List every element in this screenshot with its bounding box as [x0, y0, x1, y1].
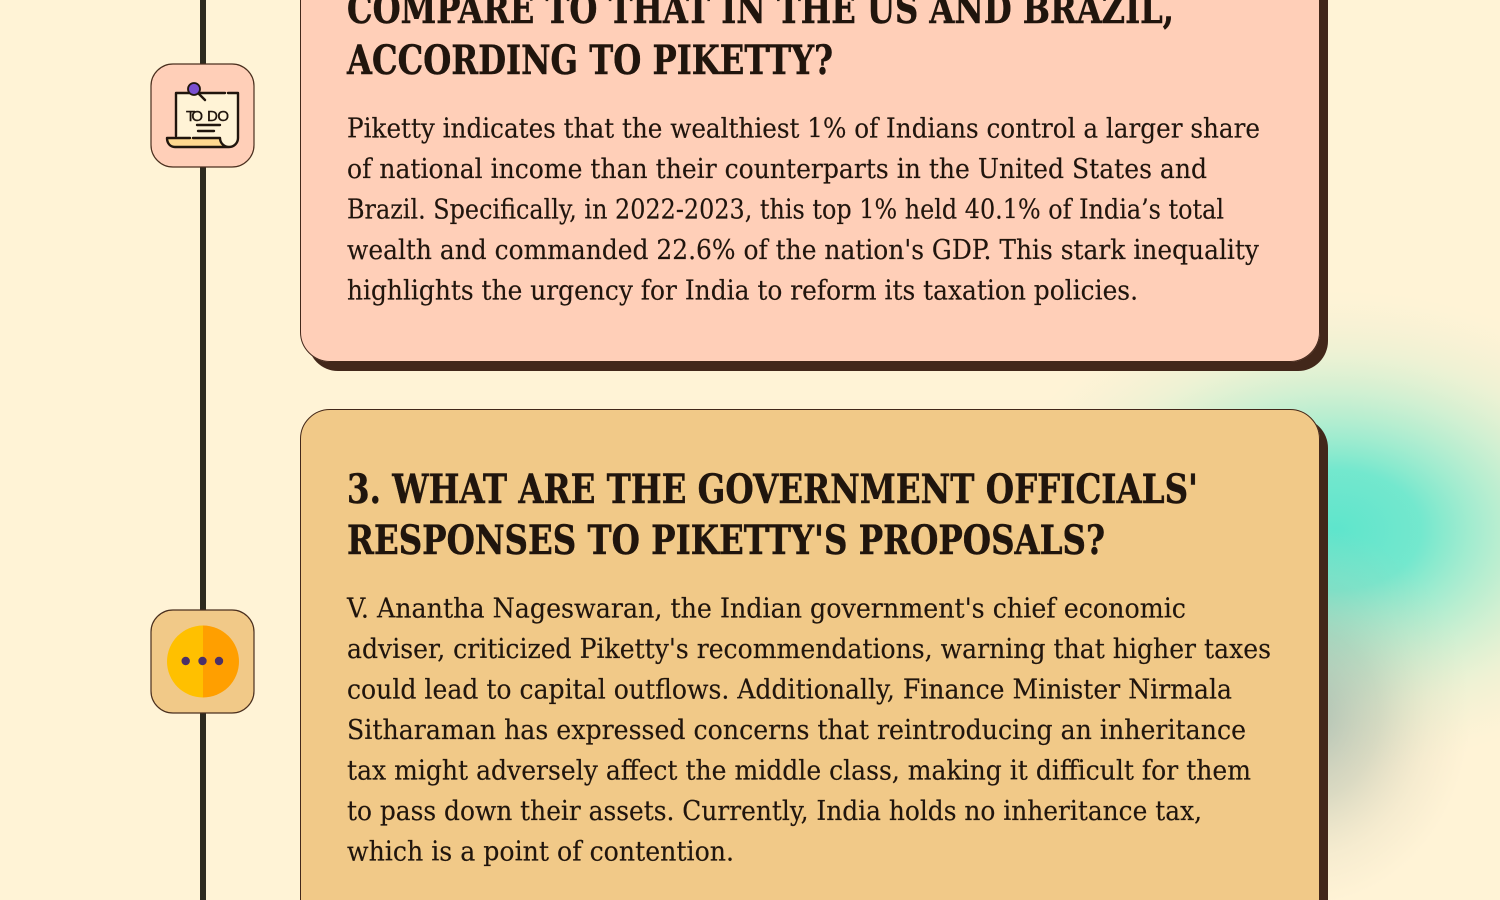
icon: to-do note: DO [207, 108, 229, 125]
text block: answer 3: adviser, criticized Piketty's recommendations, warning that higher taxes [347, 634, 1271, 665]
heading: question 3: 3. WHAT ARE THE GOVERNMENT OFFICIALS' [347, 466, 1198, 513]
text block: answer 3: to pass down their assets. Currently, India holds no inheritance tax, [347, 796, 1202, 827]
text block: answer 3 [346, 594, 1271, 868]
text block: answer 3: V. Anantha Nageswaran, the Indian government's chief economic [346, 594, 1186, 625]
icon: to-do note [151, 64, 254, 167]
heading: question 3 [347, 466, 1198, 564]
text block: answer 2 [347, 114, 1260, 307]
heading: question 3: RESPONSES TO PIKETTY'S PROPOSALS? [347, 517, 1105, 564]
text block: answer 3: Sitharaman has expressed concerns that reintroducing an inheritance [347, 715, 1246, 746]
heading: question 2 [346, 0, 1174, 84]
icon: to-do note: TO [186, 108, 203, 125]
text block: answer 2: highlights the urgency for India to reform its taxation policies. [347, 276, 1138, 307]
text block: answer 2: wealth and commanded 22.6% of the nation's GDP. This stark inequality [347, 235, 1260, 266]
text block: answer 3: could lead to capital outflows. Additionally, Finance Minister Nirmala [347, 675, 1232, 706]
icon: speech dots [151, 610, 254, 713]
text block: answer 2: Piketty indicates that the wealthiest 1% of Indians control a larger share [347, 114, 1260, 145]
card 3 shadow and body [300, 409, 1328, 900]
text block: answer 3: tax might adversely affect the middle class, making it difficult for them [347, 756, 1251, 787]
decorative glow: teal blob [990, 290, 1500, 900]
heading: question 2: ACCORDING TO PIKETTY? [346, 37, 833, 84]
panel: question 3 [300, 409, 1328, 900]
text block: answer 2: of national income than their counterparts in the United States and [347, 154, 1207, 185]
panel: question 2 [300, 0, 1328, 371]
timeline line [200, 0, 206, 900]
text block: answer 2: Brazil. Specifically, in 2022-2023, this top 1% held 40.1% of India’s total [347, 195, 1224, 226]
card 2 shadow and body [300, 0, 1328, 371]
text block: answer 3: which is a point of contention. [347, 837, 734, 868]
